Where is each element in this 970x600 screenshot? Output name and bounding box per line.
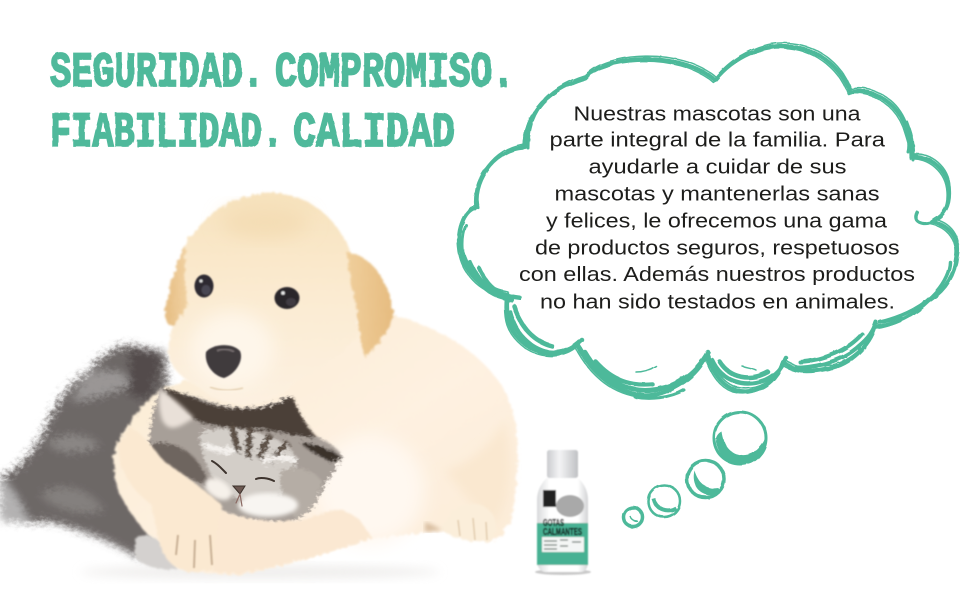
puppy left ear — [165, 244, 188, 325]
product name: CALMANTES — [543, 526, 582, 538]
product bottle — [535, 450, 591, 575]
green band — [537, 523, 588, 565]
bubble large — [714, 412, 766, 465]
pet photo — [556, 495, 584, 517]
info lines — [544, 540, 581, 549]
puppy left eye — [194, 274, 214, 298]
title: FIABILIDAD. — [50, 105, 283, 161]
kitten ear — [159, 390, 194, 428]
brand tag — [543, 490, 556, 507]
puppy right ear — [346, 252, 392, 358]
title: CALIDAD — [293, 105, 455, 161]
product name — [543, 517, 582, 538]
puppy mouth — [210, 387, 243, 390]
puppy nose — [206, 345, 241, 378]
cloud text: y felices, le ofrecemos una gama — [546, 209, 888, 232]
title: SEGURIDAD. — [50, 45, 264, 101]
bubble small — [648, 485, 680, 517]
cloud text — [519, 103, 915, 313]
puppy rear shading — [445, 420, 510, 525]
kitten body — [0, 345, 170, 560]
cloud text: ayudarle a cuidar de sus — [588, 155, 846, 178]
kitten nose and closed eyes — [212, 461, 274, 506]
puppy back paw — [442, 504, 496, 542]
puppy right eye — [274, 287, 300, 309]
product name: GOTAS — [543, 517, 564, 529]
puppy muzzle highlight — [190, 312, 274, 388]
bubble medium — [687, 460, 724, 498]
cloud text: mascotas y mantenerlas sanas — [554, 183, 880, 206]
thought cloud — [458, 43, 959, 398]
bottle shadow — [535, 569, 591, 575]
bottle cap — [547, 450, 578, 478]
puppy foreleg — [118, 428, 225, 572]
puppy body — [113, 315, 518, 575]
kitten front paw — [135, 535, 178, 570]
cloud text: parte integral de la familia. Para — [550, 129, 886, 152]
title — [50, 45, 514, 161]
cloud text: Nuestras mascotas son una — [574, 103, 861, 126]
puppy head — [168, 193, 358, 405]
cloud text: de productos seguros, respetuosos — [535, 236, 900, 259]
cloud text: no han sido testados en animales. — [540, 290, 895, 313]
puppy and kitten photo illustration — [0, 193, 518, 579]
title: COMPROMISO. — [275, 45, 514, 101]
cloud text: con ellas. Además nuestros productos — [519, 263, 915, 286]
cloud thick lower strokes — [463, 96, 950, 398]
bubble tiny — [624, 508, 642, 526]
thought bubbles — [624, 412, 766, 526]
puppy forehead shade — [221, 206, 309, 238]
puppy chest highlight — [315, 435, 425, 545]
kitten white muzzle — [238, 493, 298, 517]
bottle body — [537, 477, 588, 572]
kitten head — [148, 388, 342, 522]
info panel — [542, 537, 584, 552]
puppy paw toes — [176, 535, 212, 568]
ground shadow — [80, 565, 440, 579]
